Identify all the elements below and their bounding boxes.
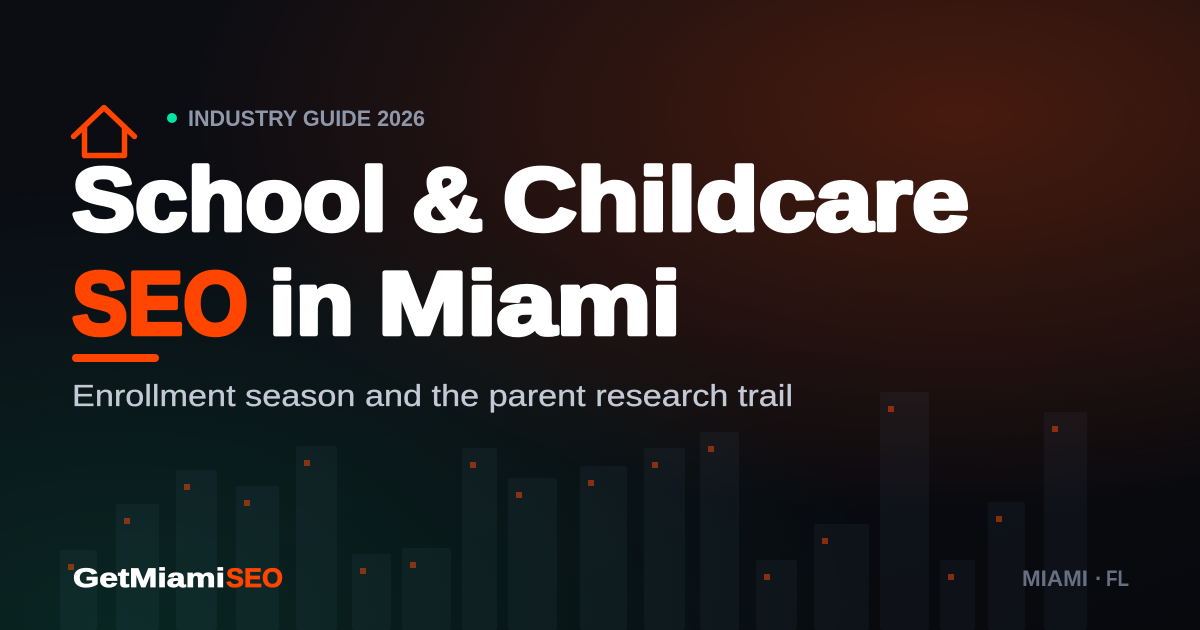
location label [1022,566,1129,591]
title line 1: School [72,149,387,249]
title line 1: Childcare [503,149,969,249]
accent underline [72,354,159,362]
brand logo: SEO [226,563,283,593]
title line 2: Miami [378,253,681,353]
title line 2: in [269,253,354,353]
eyebrow label: INDUSTRY GUIDE 2026 [188,106,425,131]
title line 2: SEO [72,253,248,353]
title line 1: & [412,149,483,249]
skyline bar chart [60,392,1087,630]
brand logo: GetMiami [73,563,225,593]
title line 1 [72,149,969,249]
location label: · [1095,566,1102,591]
location label: FL [1106,566,1129,591]
icon: house [74,108,134,156]
title line 2 [72,253,681,353]
brand logo [73,563,283,593]
status dot [167,113,177,123]
subtitle: Enrollment season and the parent research trail [72,378,793,413]
location label: MIAMI [1022,566,1088,591]
